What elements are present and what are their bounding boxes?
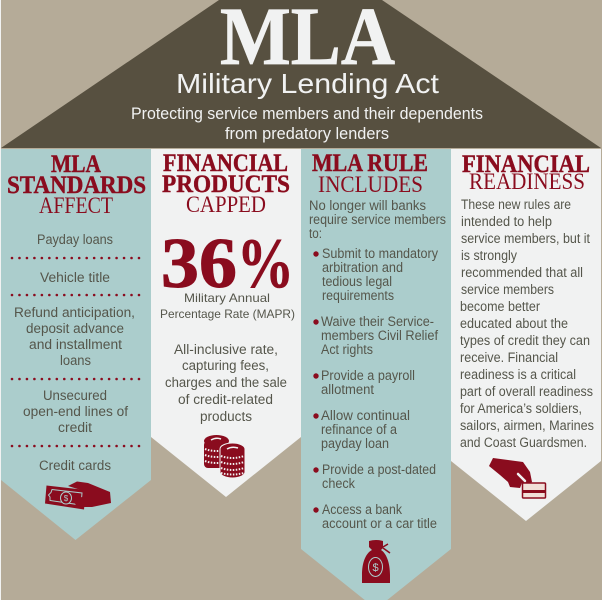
description: products <box>200 409 252 424</box>
bullet list: Submit to mandatory <box>322 246 438 261</box>
paragraph: types of credit they can <box>460 333 590 348</box>
paragraph: become better <box>460 299 540 314</box>
intro <box>309 198 446 241</box>
heading: FINANCIAL <box>462 151 590 178</box>
bullet list <box>313 246 438 531</box>
heading: FINANCIAL <box>163 150 288 177</box>
icon: money bag: $ <box>372 562 379 574</box>
stat: 36%: % <box>237 225 294 303</box>
intro: to: <box>309 226 322 241</box>
list of loan types: Vehicle title <box>40 270 110 285</box>
list of loan types: credit <box>58 420 92 435</box>
paragraph: service members, but it <box>461 231 590 246</box>
list of loan types <box>12 232 139 473</box>
list of loan types: Payday loans <box>37 232 113 247</box>
paragraph: readiness is a critical <box>460 367 576 382</box>
intro: No longer will banks <box>309 198 426 213</box>
paragraph: recommended that all <box>461 265 583 280</box>
bullet list: members Civil Relief <box>321 328 438 343</box>
stat label: Military Annual <box>184 291 270 305</box>
stat: 36%: 36 <box>161 225 237 303</box>
list of loan types: Unsecured <box>43 388 107 403</box>
paragraph: educated about the <box>460 316 568 331</box>
bullet list: check <box>322 476 355 491</box>
heading <box>312 150 428 197</box>
bullet list: Act rights <box>321 342 373 357</box>
panel: MLA rule includes <box>301 149 451 600</box>
description: charges and the sale <box>165 375 287 390</box>
paragraph: part of overall readiness <box>460 384 593 399</box>
bullet list: refinance of a <box>321 422 397 437</box>
paragraph: intended to help <box>461 214 552 229</box>
icon: coin stacks <box>204 435 245 478</box>
bullet list: allotment <box>321 382 374 397</box>
list of loan types: Refund anticipation, <box>14 305 135 320</box>
bullet list: requirements <box>322 288 394 303</box>
paragraph: is strongly <box>461 248 517 263</box>
heading: MLA <box>51 151 101 178</box>
heading: STANDARDS <box>7 172 146 199</box>
bullet list: payday loan <box>321 436 389 451</box>
heading <box>7 151 146 218</box>
bullet list: Waive their Service- <box>321 314 434 329</box>
description: capturing fees, <box>182 358 269 373</box>
tagline <box>131 104 483 143</box>
icon: hand holding credit card <box>489 458 546 498</box>
paragraph: and Coast Guardsmen. <box>460 435 587 450</box>
bullet list: Allow continual <box>321 408 410 423</box>
heading: CAPPED <box>186 192 266 217</box>
description <box>165 342 287 424</box>
panel: MLA standards affect <box>1 149 151 540</box>
description: All-inclusive rate, <box>174 342 278 357</box>
list of loan types: Credit cards <box>39 458 111 473</box>
heading: READINESS <box>469 169 585 194</box>
list of loan types: deposit advance <box>26 321 124 336</box>
heading: PRODUCTS <box>162 171 290 198</box>
icon: hand holding money <box>45 482 111 510</box>
icon: hand holding money: $ <box>64 494 69 503</box>
paragraph <box>460 197 594 450</box>
panel: financial readiness <box>451 149 601 521</box>
heading <box>162 150 290 217</box>
stat: 36% <box>161 225 294 303</box>
stat label: Percentage Rate (MAPR) <box>160 307 295 321</box>
bullet list: arbitration and <box>322 260 403 275</box>
bullet list: tedious legal <box>322 274 392 289</box>
description: of credit-related <box>178 392 273 407</box>
intro: require service members <box>309 212 446 227</box>
tagline: Protecting service members and their dependents <box>131 104 483 123</box>
bullet list: account or a car title <box>322 516 437 531</box>
tagline: from predatory lenders <box>225 124 389 143</box>
heading: MLA RULE <box>312 150 428 177</box>
panel: financial products capped <box>151 149 301 497</box>
list of loan types: open-end lines of <box>23 404 128 419</box>
heading: INCLUDES <box>318 172 423 197</box>
bullet list: Provide a post-dated <box>322 462 436 477</box>
paragraph: receive. Financial <box>460 350 558 365</box>
icon: money bag <box>362 540 390 583</box>
stat label <box>160 291 295 321</box>
paragraph: sailors, airmen, Marines <box>460 418 594 433</box>
heading <box>462 151 590 194</box>
paragraph: These new rules are <box>461 197 571 212</box>
paragraph: for America’s soldiers, <box>460 401 582 416</box>
heading: AFFECT <box>39 193 113 218</box>
list of loan types: and installment <box>29 337 122 352</box>
subtitle: Military Lending Act <box>176 68 439 99</box>
list of loan types: loans <box>60 353 91 368</box>
bullet list: Access a bank <box>322 502 402 517</box>
paragraph: service members <box>461 282 554 297</box>
bullet list: Provide a payroll <box>321 368 415 383</box>
roof header <box>1 0 601 148</box>
